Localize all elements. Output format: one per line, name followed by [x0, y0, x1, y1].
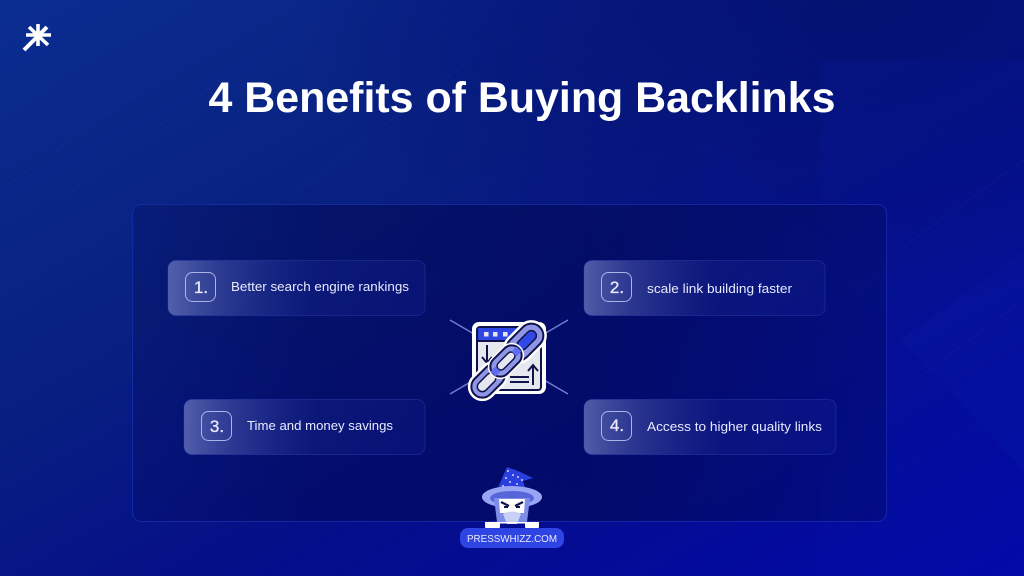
badge: presswhizz.com: PRESSWHIZZ.COM	[467, 533, 557, 545]
card 1: better search engine rankings: Better search engine rankings	[231, 280, 409, 294]
card 2: scale link building faster: 2.	[610, 278, 624, 297]
logo icon: asterisk mark	[24, 24, 51, 50]
card 1: better search engine rankings: 1.	[194, 278, 208, 297]
mascot: wizard	[482, 467, 542, 528]
card 4: access to higher quality links: 4.	[610, 416, 624, 435]
card 3: time and money savings: 3.	[210, 417, 224, 436]
title: 4 Benefits of Buying Backlinks	[208, 75, 836, 122]
card 4: access to higher quality links: Access to higher quality links	[647, 420, 822, 434]
icon: broken chain over browser window	[450, 319, 568, 402]
card 3: time and money savings: Time and money savings	[247, 419, 393, 433]
card 3: time and money savings	[184, 400, 425, 454]
card 4: access to higher quality links	[584, 400, 836, 454]
card 1: better search engine rankings	[168, 260, 425, 316]
card 2: scale link building faster	[584, 260, 825, 316]
chain links	[467, 319, 548, 402]
card 2: scale link building faster: scale link building faster	[647, 282, 792, 296]
panel: benefits container	[132, 204, 886, 528]
badge: presswhizz.com	[460, 528, 564, 548]
